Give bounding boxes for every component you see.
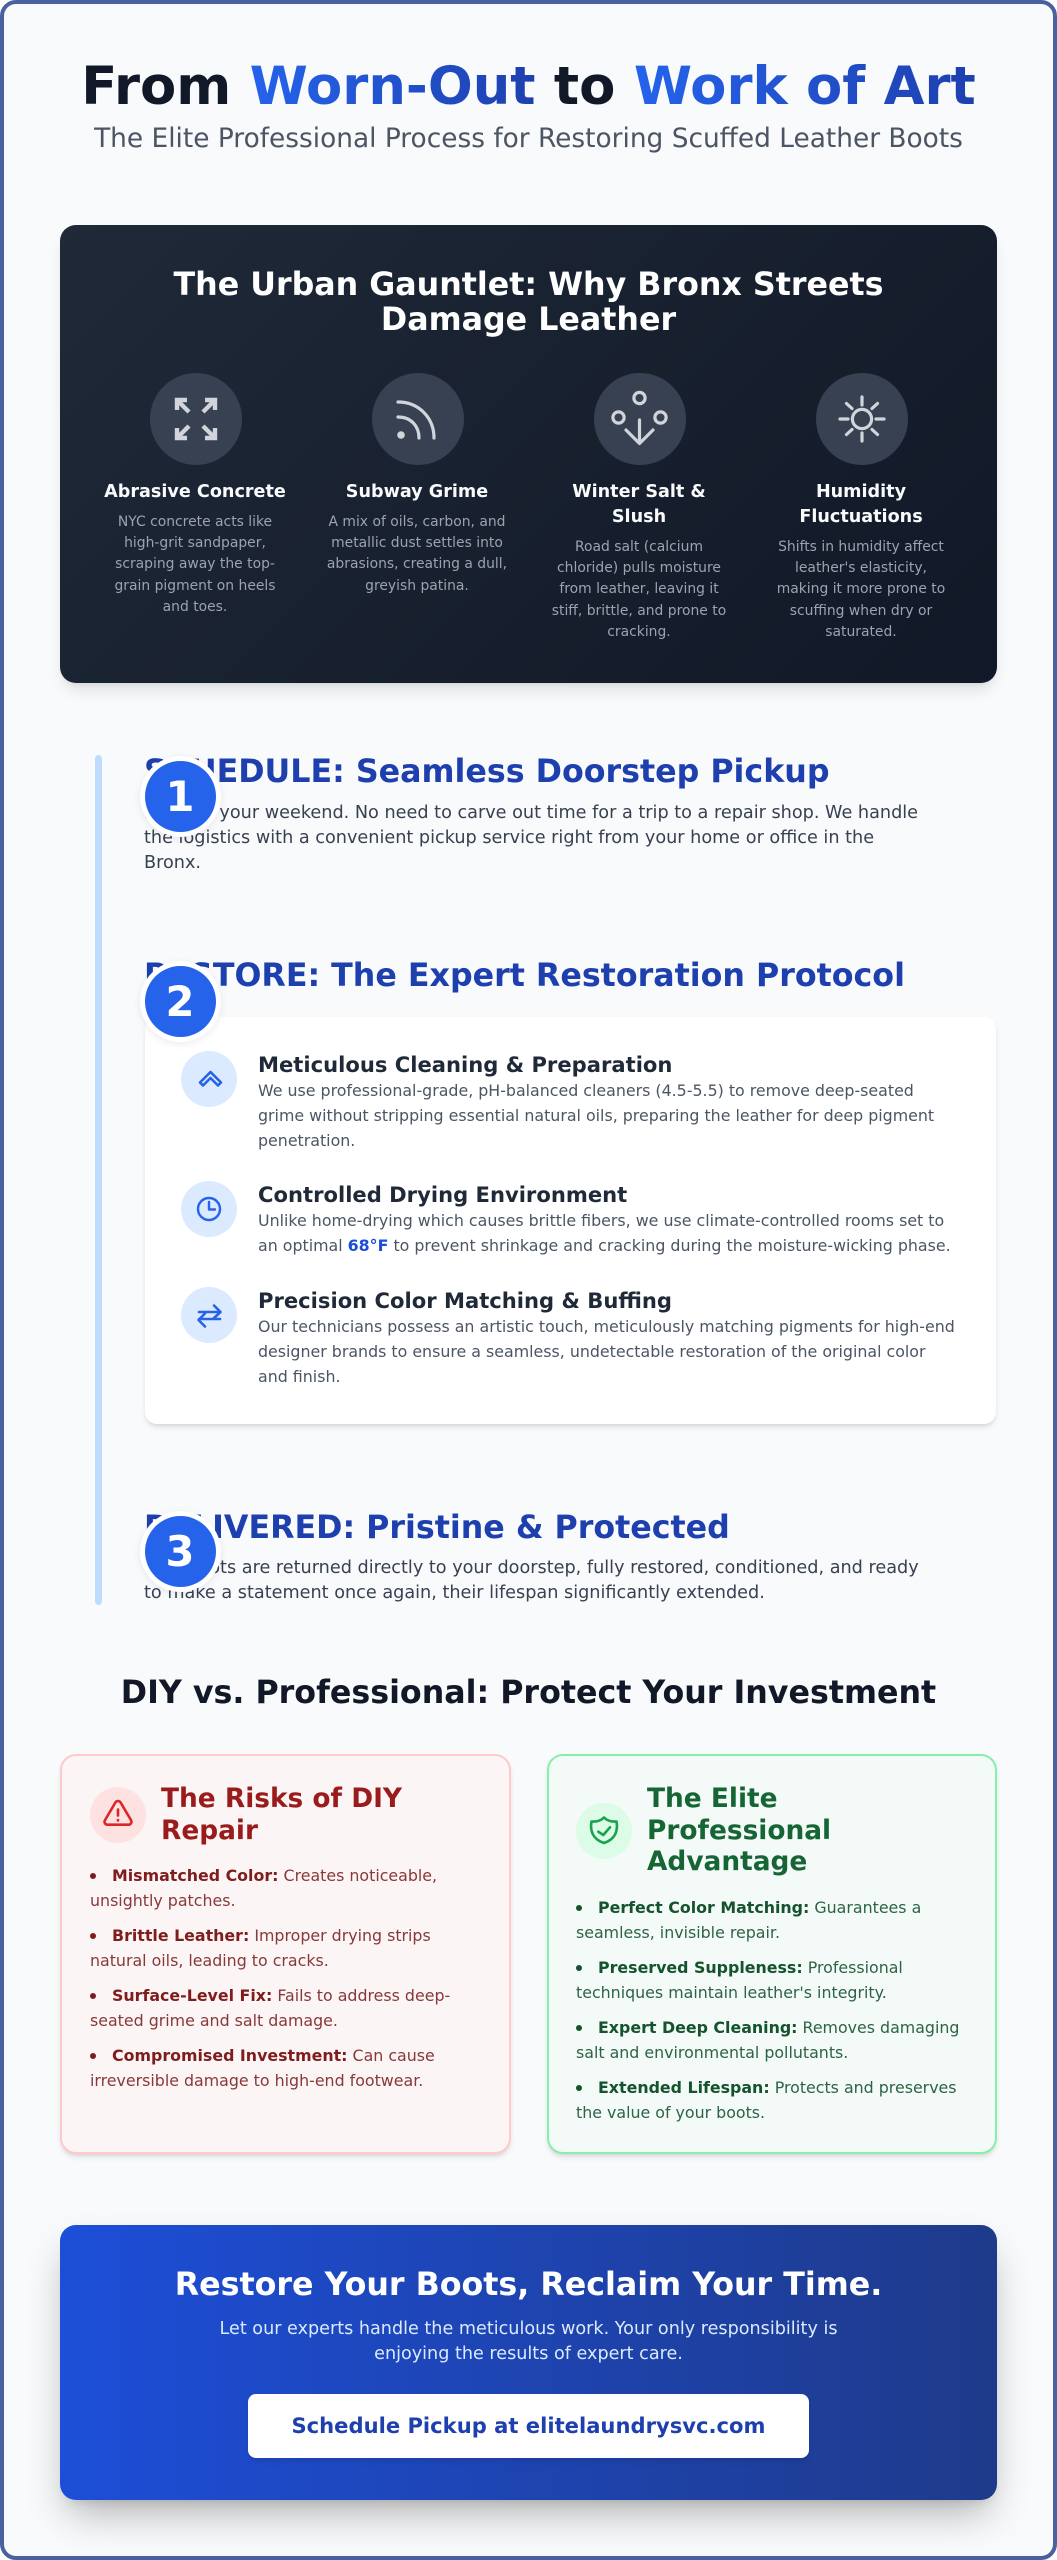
card heading: [647, 1783, 831, 1877]
step 1 text: Reclaim your weekend. No need to carve out time for a trip to a repair shop. We handle: [144, 803, 918, 823]
panel heading: Damage Leather: [381, 302, 676, 338]
icon: exchange arrows: [181, 1287, 237, 1343]
step 1 badge: 1: [166, 772, 194, 821]
cta text: enjoying the results of expert care.: [374, 2344, 683, 2364]
risk item: Surface-Level Fix: Fails to address deep-: [112, 1986, 450, 2005]
card heading: The Elite: [647, 1783, 778, 1814]
advantage item: [576, 1958, 903, 2002]
advantage item: Expert Deep Cleaning: Removes damaging: [598, 2018, 959, 2037]
item: winter salt: [552, 373, 726, 640]
substep title: Controlled Drying Environment: [258, 1182, 627, 1207]
item description: high-grit sandpaper,: [124, 535, 266, 551]
substep text: an optimal 68°F to prevent shrinkage and cracking during the moisture-wicking phase.: [258, 1236, 951, 1255]
step 3 text: [144, 1558, 919, 1603]
substep text: designer brands to ensure a seamless, undetectable restoration of the original color: [258, 1342, 926, 1361]
risk item: irreversible damage to high-end footwear.: [90, 2071, 423, 2090]
step 1 badge: [144, 761, 216, 832]
item description: Shifts in humidity affect: [778, 539, 944, 555]
substep text: Our technicians possess an artistic touch, meticulously matching pigments for high-end: [258, 1317, 955, 1336]
substep text: [258, 1081, 934, 1150]
step 2 heading: RESTORE: The Expert Restoration Protocol: [144, 958, 905, 994]
panel heading: [174, 267, 883, 338]
advantages list: [576, 1898, 959, 2122]
card heading: Professional: [647, 1815, 831, 1846]
cta button: Schedule Pickup at elitelaundrysvc.com: [291, 2413, 766, 2438]
substep text: grime without stripping essential natural oils, preparing the leather for deep pigment: [258, 1106, 934, 1125]
item description: chloride) pulls moisture: [557, 560, 721, 576]
risk item: [90, 2046, 435, 2090]
advantage item: Preserved Suppleness: Professional: [598, 1958, 903, 1977]
risk item: Compromised Investment: Can cause: [112, 2046, 435, 2065]
item title: [572, 482, 706, 527]
advantage item: Perfect Color Matching: Guarantees a: [598, 1898, 921, 1917]
item description: [552, 539, 726, 640]
risk item: natural oils, leading to cracks.: [90, 1951, 329, 1970]
item description: [114, 514, 276, 615]
step 1 text: Bronx.: [144, 853, 201, 873]
substep text: and finish.: [258, 1367, 341, 1386]
item description: Road salt (calcium: [575, 539, 703, 555]
step 1 heading: SCHEDULE: Seamless Doorstep Pickup: [144, 754, 830, 790]
step 3 text: to make a statement once again, their lifespan significantly extended.: [144, 1583, 765, 1603]
icon: warning triangle: [90, 1787, 146, 1843]
advantage item: salt and environmental pollutants.: [576, 2043, 848, 2062]
panel: call to action: [60, 2225, 997, 2500]
panel: elite advantage: [547, 1754, 997, 2154]
step 1 text: [144, 803, 918, 873]
icon: signal arcs: [372, 373, 464, 465]
substep text: penetration.: [258, 1131, 355, 1150]
item title: Subway Grime: [346, 482, 488, 502]
item title: Slush: [612, 507, 666, 527]
item description: making it more prone to: [777, 581, 945, 597]
advantage item: Extended Lifespan: Protects and preserves: [598, 2078, 957, 2097]
subtitle: The Elite Professional Process for Restoring Scuffed Leather Boots: [94, 123, 963, 154]
substep title: Meticulous Cleaning & Preparation: [258, 1052, 672, 1077]
step 3 badge: [144, 1516, 216, 1587]
panel: risks of DIY: [60, 1754, 511, 2154]
substep title: Precision Color Matching & Buffing: [258, 1288, 672, 1313]
item description: and toes.: [163, 599, 227, 615]
cta text: [220, 2319, 838, 2364]
icon: clock: [181, 1181, 237, 1237]
advantage item: [576, 2078, 957, 2122]
icon: salt falling: [594, 373, 686, 465]
substep text: [258, 1211, 951, 1255]
item title: [799, 482, 923, 527]
risk item: Mismatched Color: Creates noticeable,: [112, 1866, 437, 1885]
icon: shield check: [576, 1803, 632, 1859]
step 2: [140, 958, 997, 1428]
panel heading: The Urban Gauntlet: Why Bronx Streets: [174, 267, 883, 303]
risks list: [90, 1866, 450, 2090]
substep text: [258, 1317, 955, 1386]
step 2 badge: 2: [166, 977, 194, 1026]
item description: scraping away the top-: [115, 556, 275, 572]
item description: from leather, leaving it: [559, 581, 719, 597]
advantage item: [576, 2018, 959, 2062]
step 1 text: the logistics with a convenient pickup service right from your home or office in the: [144, 828, 874, 848]
risk item: seated grime and salt damage.: [90, 2011, 338, 2030]
panel: urban gauntlet: [60, 225, 997, 683]
step 1: [140, 754, 918, 873]
item title: Winter Salt &: [572, 482, 706, 502]
advantage item: techniques maintain leather's integrity.: [576, 1983, 887, 2002]
step 3: [140, 1510, 919, 1603]
item description: grain pigment on heels: [114, 578, 276, 594]
step 3 badge: 3: [166, 1527, 194, 1576]
step 3 text: Your boots are returned directly to your doorstep, fully restored, conditioned, and ready: [144, 1558, 919, 1578]
risk item: [90, 1986, 450, 2030]
item description: greyish patina.: [365, 578, 469, 594]
substep text: Unlike home-drying which causes brittle fibers, we use climate-controlled rooms set to: [258, 1211, 944, 1230]
item title: Humidity: [816, 482, 906, 502]
card heading: Advantage: [647, 1846, 807, 1877]
card heading: The Risks of DIY: [161, 1783, 402, 1814]
advantage item: the value of your boots.: [576, 2103, 765, 2122]
item title: Fluctuations: [799, 507, 923, 527]
risk item: [90, 1926, 431, 1970]
item: subway grime: [327, 373, 507, 594]
item description: saturated.: [825, 624, 897, 640]
cta heading: Restore Your Boots, Reclaim Your Time.: [175, 2267, 882, 2303]
title: From Worn-Out to Work of Art: [81, 56, 976, 117]
risk item: unsightly patches.: [90, 1891, 236, 1910]
item: abrasive concrete: [104, 373, 286, 615]
panel: restoration protocol: [145, 1017, 996, 1424]
item description: cracking.: [607, 624, 671, 640]
comparison heading: DIY vs. Professional: Protect Your Investment: [121, 1675, 936, 1711]
cta text: Let our experts handle the meticulous work. Your only responsibility is: [220, 2319, 838, 2339]
item description: metallic dust settles into: [331, 535, 503, 551]
cta button: [248, 2394, 809, 2458]
card heading: [161, 1783, 402, 1846]
icon: expanding arrows: [150, 373, 242, 465]
item description: A mix of oils, carbon, and: [328, 514, 505, 530]
item description: abrasions, creating a dull,: [327, 556, 507, 572]
advantage item: seamless, invisible repair.: [576, 1923, 780, 1942]
card heading: Repair: [161, 1815, 258, 1846]
risk item: Brittle Leather: Improper drying strips: [112, 1926, 431, 1945]
item description: leather's elasticity,: [795, 560, 927, 576]
item description: scuffing when dry or: [790, 603, 932, 619]
icon: cleaning chevron: [181, 1051, 237, 1107]
timeline rail: [95, 755, 102, 1605]
risk item: [90, 1866, 437, 1910]
advantage item: [576, 1898, 921, 1942]
item title: Abrasive Concrete: [104, 482, 286, 502]
item description: [327, 514, 507, 594]
icon: sun: [816, 373, 908, 465]
item description: stiff, brittle, and prone to: [552, 603, 726, 619]
item: humidity: [777, 373, 945, 640]
step 3 heading: DELIVERED: Pristine & Protected: [144, 1510, 730, 1546]
item description: NYC concrete acts like: [118, 514, 272, 530]
substep text: We use professional-grade, pH-balanced cleaners (4.5-5.5) to remove deep-seated: [258, 1081, 914, 1100]
step 2 badge: [144, 966, 216, 1037]
item description: [777, 539, 945, 640]
